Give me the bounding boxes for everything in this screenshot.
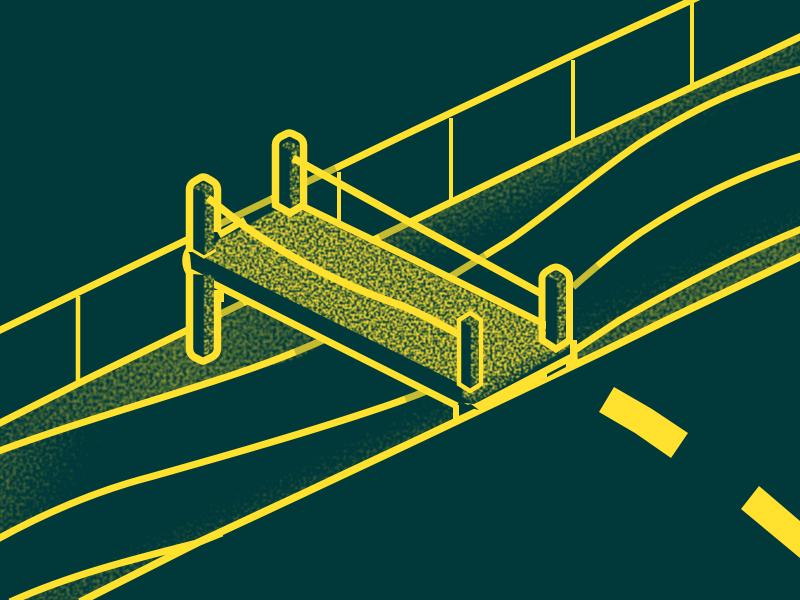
beam cap bbox=[182, 248, 192, 276]
front beam bbox=[190, 254, 462, 408]
band slots bbox=[462, 364, 566, 410]
deck railing back bbox=[293, 158, 542, 294]
deck underlay bbox=[205, 210, 574, 404]
deck back edge bbox=[300, 205, 548, 326]
curve: upper left bank bbox=[0, 337, 330, 452]
post: front left bbox=[190, 177, 218, 361]
bridge bbox=[182, 133, 578, 424]
side beam band bbox=[464, 340, 578, 412]
lower rail line bbox=[0, 35, 800, 425]
beam support stubs bbox=[221, 290, 456, 424]
road dash 2 bbox=[741, 486, 800, 558]
main bank line bbox=[80, 255, 800, 600]
road dash 1 bbox=[599, 387, 688, 458]
post: back left bbox=[276, 133, 304, 213]
curve: upper right bank bbox=[445, 68, 800, 280]
front beam lower edge bbox=[190, 272, 457, 406]
curve: lower left fork bbox=[10, 533, 222, 600]
deck surface bbox=[205, 210, 574, 404]
faded line ends near the bridge bbox=[221, 169, 598, 398]
curve: lower right bank bbox=[572, 228, 800, 352]
deck curved front railing bbox=[208, 198, 460, 335]
curve: middle right bank bbox=[573, 155, 800, 287]
curve: middle left bank bbox=[0, 381, 450, 540]
fence: top rail and posts bbox=[0, 0, 705, 384]
post: front right bbox=[459, 313, 481, 391]
deck back-left edge bbox=[219, 220, 245, 235]
post: back right bbox=[542, 267, 570, 349]
